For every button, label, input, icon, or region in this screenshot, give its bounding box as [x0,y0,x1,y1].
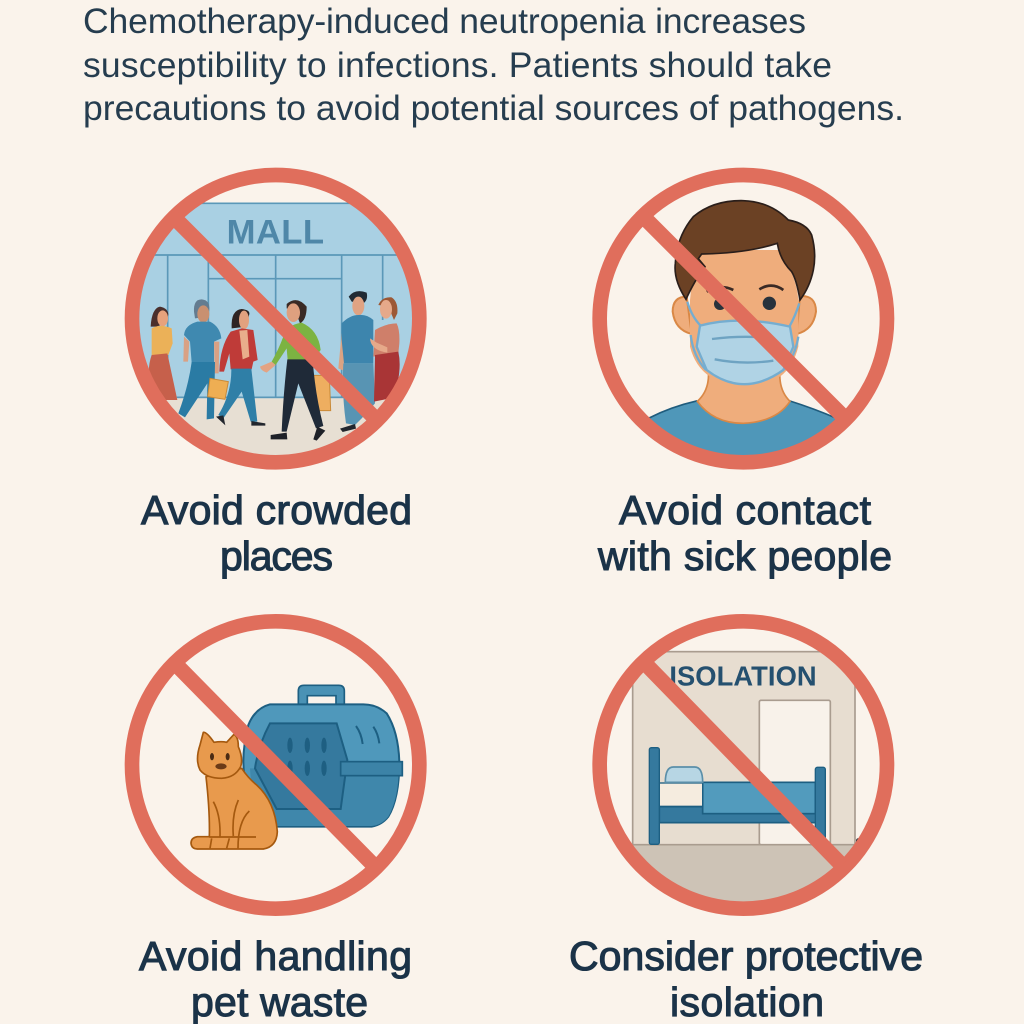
person 3 [232,309,249,328]
carrier latch [341,762,402,776]
label: consider protective isolation [569,933,923,1024]
person 6 [378,297,397,320]
label: avoid crowded places [141,487,412,579]
door [759,700,830,845]
person 2 [194,299,209,318]
label: avoid contact [597,487,892,579]
shopping bag 1 [208,378,228,399]
brows and eyes [707,286,783,292]
shopping bag 2 [313,375,331,411]
panel: consider protective isolation [569,621,923,1024]
icon: crowded mall: MALL [227,213,324,251]
person 5 [349,291,367,303]
cat [191,732,277,849]
panel: avoid crowded places [130,175,423,579]
label: avoid crowded places: places [220,533,333,579]
hair [675,201,815,300]
carrier body [243,704,399,827]
carrier handle [298,685,344,705]
face [690,250,798,377]
icon: crowded mall [130,175,423,465]
sign: ISOLATION [669,661,817,692]
carrier door [255,723,347,809]
label: avoid handling pet waste: pet waste [191,979,368,1024]
label: consider protective isolation: Consider protective [569,933,923,979]
label: consider protective isolation: isolation [670,979,824,1024]
ears [673,297,692,334]
floor [634,846,853,902]
icon: cat and carrier [132,621,419,909]
intro text: susceptibility to infections. Patients should take [83,45,832,85]
panel: avoid contact with sick people [597,175,892,579]
icon: man with mask [600,175,887,467]
intro text [83,1,904,128]
mask [697,321,793,384]
neck [697,370,790,423]
wall [633,652,855,845]
label: avoid contact: with sick people [597,533,892,579]
icon: isolation room [600,621,887,911]
label: avoid handling pet waste: Avoid handling [139,933,412,979]
shirt [649,400,836,455]
intro text: Chemotherapy-induced neutropenia increases [83,1,806,41]
bed [659,807,816,823]
label: avoid crowded places: Avoid crowded [141,487,412,533]
person 1 [151,307,168,327]
label: avoid contact: Avoid contact [619,487,872,533]
person 4 [287,300,307,323]
intro text: precautions to avoid potential sources of pathogens. [83,88,904,128]
panel: avoid handling pet waste [132,621,419,1024]
label: avoid handling pet waste [139,933,412,1024]
